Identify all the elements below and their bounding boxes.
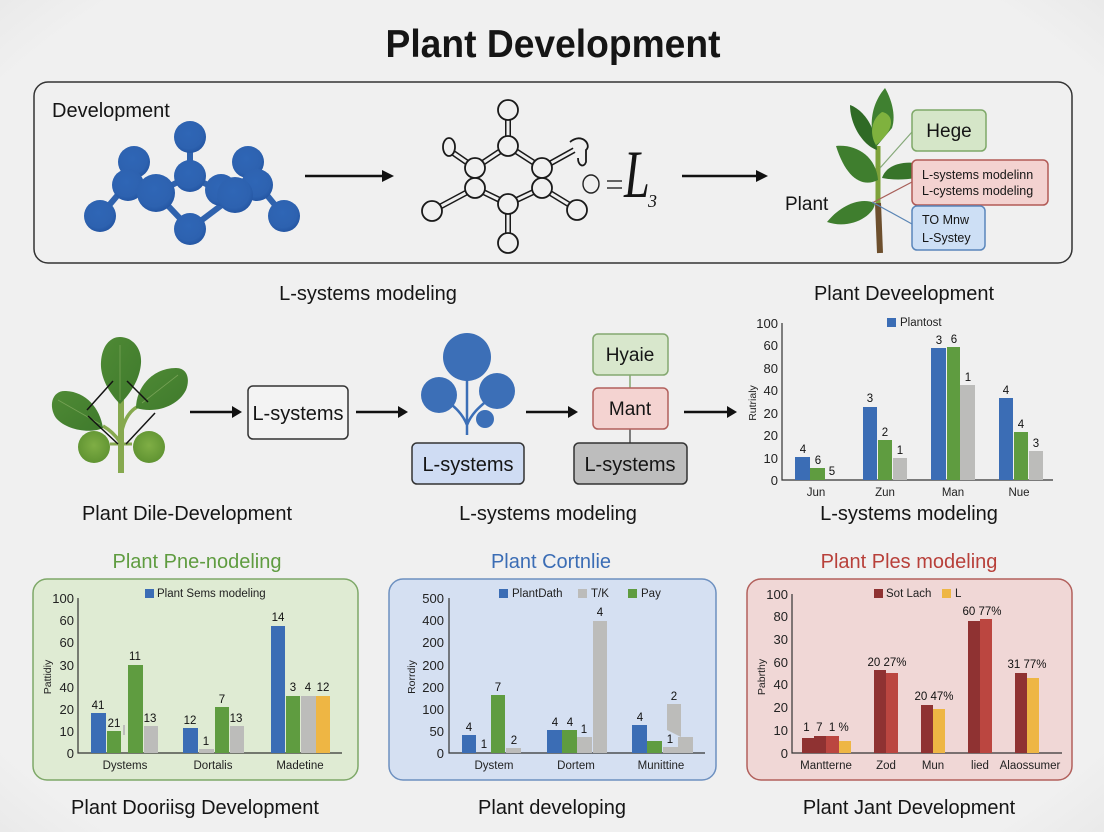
legend <box>499 588 661 600</box>
panel: green chart: 30 <box>60 658 74 673</box>
panel: red chart: 0 <box>781 746 788 761</box>
arrow: plant to l-systems <box>190 406 242 418</box>
panel: green chart: 3 <box>290 682 296 694</box>
arrow: tree to stack <box>526 406 578 418</box>
callout: l-systems modeling: L-cystems modeling <box>922 184 1033 198</box>
panel: green chart: 20 <box>60 702 74 717</box>
panel: red chart: Mantterne <box>800 760 852 772</box>
panel: blue chart: 4 <box>637 712 644 724</box>
panel: green chart: 12 <box>184 715 196 727</box>
arrow: formula to plant <box>682 170 768 182</box>
panel: blue chart: 1 <box>667 734 673 746</box>
panel: red chart: 20 <box>774 700 788 715</box>
legend: PlantDath <box>512 588 563 600</box>
panel: green chart: 1 <box>203 736 209 748</box>
panel: green chart: 13 <box>230 713 242 725</box>
box: mant: Mant <box>609 399 652 420</box>
bar chart: top right: 3 <box>867 393 873 405</box>
callout: l-systems modeling: L-systems modelinn <box>922 168 1033 182</box>
panel: top pathway <box>34 82 1072 263</box>
bar chart: top right: 10 <box>764 451 778 466</box>
legend: Sot Lach <box>886 588 931 600</box>
panel: blue chart: 1 <box>581 724 587 736</box>
panel: green chart: 60 <box>60 613 74 628</box>
panel: green chart: Madetine <box>276 760 324 772</box>
bar chart: top right: 20 <box>764 428 778 443</box>
panel: red chart: Alaossumer <box>1000 760 1061 772</box>
bar chart: top right: 3 <box>1033 438 1039 450</box>
legend: Plant Sems modeling <box>157 588 266 600</box>
panel: blue chart: 4 <box>552 717 559 729</box>
bar chart: top right: 4 <box>800 444 807 456</box>
box: l-systems blue <box>412 443 524 484</box>
legend: L <box>955 588 962 600</box>
caption: plant jant development: Plant Jant Development <box>803 797 1016 819</box>
bar chart: top right: 5 <box>829 466 835 478</box>
panel: red chart: 80 <box>774 609 788 624</box>
caption: plant dooriisg development: Plant Dooriisg Development <box>71 797 319 819</box>
callout: l-system: L-Systey <box>922 231 971 245</box>
bar chart: top right: Man <box>942 487 964 499</box>
panel: green chart: 0 <box>67 746 74 761</box>
panel: red chart: Zod <box>876 760 896 772</box>
panel: green chart <box>33 579 358 780</box>
title: Plant Development <box>386 23 721 66</box>
panel: green chart: 7 <box>219 694 225 706</box>
heading: blue panel: Plant Cortnlie <box>491 551 611 573</box>
panel: blue chart <box>389 579 716 780</box>
panel: green chart: Pattidiy <box>42 659 54 694</box>
panel: blue chart: 2 <box>511 735 517 747</box>
panel: green chart: 4 <box>305 682 312 694</box>
bar chart: top right: 3 <box>936 335 942 347</box>
panel: blue chart: Munittine <box>638 760 684 772</box>
legend: Pay <box>641 588 661 600</box>
formula: 3 <box>647 191 657 211</box>
formula: L <box>623 136 650 212</box>
arrow: stack to chart <box>684 406 737 418</box>
panel: blue chart: 200 <box>422 680 444 695</box>
panel label: development: Development <box>52 100 170 122</box>
panel: blue chart: Dystem <box>475 760 513 772</box>
bar chart: top right: 1 <box>897 445 903 457</box>
icon: young plant <box>827 88 916 253</box>
panel: green chart: 11 <box>129 651 141 663</box>
icon: blue tree <box>421 333 515 435</box>
bar chart: top right: Nue <box>1008 487 1030 499</box>
panel: blue chart: 2 <box>671 691 677 703</box>
callout: hege <box>912 110 986 151</box>
panel: red chart: 20 27% <box>867 657 907 669</box>
panel: blue chart: 7 <box>495 682 501 694</box>
box: l-systems grey: L-systems <box>584 454 676 476</box>
panel: blue chart: 200 <box>422 635 444 650</box>
panel: red chart: 31 77% <box>1007 659 1047 671</box>
panel: blue chart: Rorrdiy <box>406 659 418 694</box>
panel: blue chart: 1 <box>481 739 487 751</box>
box: l-systems grey <box>574 443 687 484</box>
bar chart: top right: Jun <box>807 487 825 499</box>
panel: red chart: lied <box>971 760 989 772</box>
callout: hege: Hege <box>926 121 972 142</box>
bar chart: top right: Rutrialy <box>747 384 759 421</box>
heading: green panel: Plant Pne-nodeling <box>112 551 282 573</box>
panel: green chart: Dortalis <box>194 760 233 772</box>
legend: T/K <box>591 588 609 600</box>
panel: red chart: 40 <box>774 677 788 692</box>
panel: blue chart: 200 <box>422 658 444 673</box>
bar chart: top right: 4 <box>1018 419 1025 431</box>
caption: plant developing: Plant developing <box>478 797 626 819</box>
heading: red panel: Plant Ples modeling <box>821 551 997 573</box>
caption: l-systems modeling center: L-systems modeling <box>459 503 637 525</box>
bar chart: top right: 100 <box>756 316 778 331</box>
panel: green chart: 10 <box>60 724 74 739</box>
panel: green chart: 14 <box>272 612 285 624</box>
bar chart: top right: 4 <box>1003 385 1010 397</box>
panel: green chart: 12 <box>317 682 329 694</box>
panel: blue chart: 4 <box>466 722 473 734</box>
legend: Plantost <box>900 317 942 329</box>
panel: red chart: 10 <box>774 723 788 738</box>
caption: plant dile-development: Plant Dile-Development <box>82 503 292 525</box>
box: l-systems blue: L-systems <box>422 454 514 476</box>
panel: red chart: 1 7 1 % <box>803 722 849 734</box>
panel: blue chart: 0 <box>437 746 444 761</box>
panel: blue chart: Dortem <box>557 760 595 772</box>
box: hyaie: Hyaie <box>606 345 654 366</box>
bar chart: top right: 2 <box>882 427 888 439</box>
box: hyaie <box>593 334 668 375</box>
bar chart: top right: 20 <box>764 406 778 421</box>
panel: red chart: 100 <box>766 587 788 602</box>
arrow: molecule to structure <box>305 170 394 182</box>
panel: blue chart: 400 <box>422 613 444 628</box>
panel: green chart: 100 <box>52 591 74 606</box>
callout: l-systems modeling <box>912 160 1048 205</box>
icon: blue molecule <box>84 121 300 245</box>
bar chart: top right: 6 <box>815 455 821 467</box>
panel: green chart: 41 <box>92 700 104 712</box>
caption: plant development: Plant Deveelopment <box>814 283 994 305</box>
panel: green chart: 40 <box>60 680 74 695</box>
bar chart: top right: 1 <box>965 372 971 384</box>
icon: outline structure <box>422 100 588 253</box>
bar chart: top right: 80 <box>764 361 778 376</box>
arrow: l-systems to tree <box>356 406 408 418</box>
callout: l-system: TO Mnw <box>922 213 970 227</box>
plant label: Plant <box>785 194 829 215</box>
bar chart: top right: 60 <box>764 338 778 353</box>
legend <box>874 588 962 600</box>
bar chart: top right: Zun <box>875 487 895 499</box>
panel: red chart: 20 47% <box>914 691 954 703</box>
panel: green chart: 60 <box>60 635 74 650</box>
bar chart: top right: 0 <box>771 473 778 488</box>
panel: red chart: 60 <box>774 655 788 670</box>
stacked boxes <box>574 334 687 484</box>
panel: red chart: 30 <box>774 632 788 647</box>
panel: green chart: 21 <box>108 718 120 730</box>
caption: l-systems modeling right: L-systems modeling <box>820 503 998 525</box>
callout: l-system <box>912 206 985 250</box>
formula <box>583 136 657 212</box>
box: l-systems <box>248 386 348 439</box>
panel: blue chart: 4 <box>567 717 574 729</box>
panel: green chart: Dystems <box>103 760 148 772</box>
panel: red chart: Pabrthy <box>756 658 768 695</box>
box: mant <box>593 388 668 429</box>
panel: red chart: 60 77% <box>962 606 1002 618</box>
panel: red chart <box>747 579 1072 780</box>
icon: leafy plant <box>52 337 188 473</box>
panel: blue chart: 100 <box>422 702 444 717</box>
panel: red chart: Mun <box>922 760 944 772</box>
bar chart: top right: 40 <box>764 383 778 398</box>
bar chart: top right <box>747 316 1053 499</box>
panel: green chart: 13 <box>144 713 156 725</box>
box: l-systems: L-systems <box>252 403 344 425</box>
bar chart: top right: 6 <box>951 334 957 346</box>
panel: blue chart: 500 <box>422 591 444 606</box>
panel: blue chart: 50 <box>430 724 444 739</box>
caption: l-systems modeling: L-systems modeling <box>279 283 457 305</box>
panel: blue chart: 4 <box>597 607 604 619</box>
